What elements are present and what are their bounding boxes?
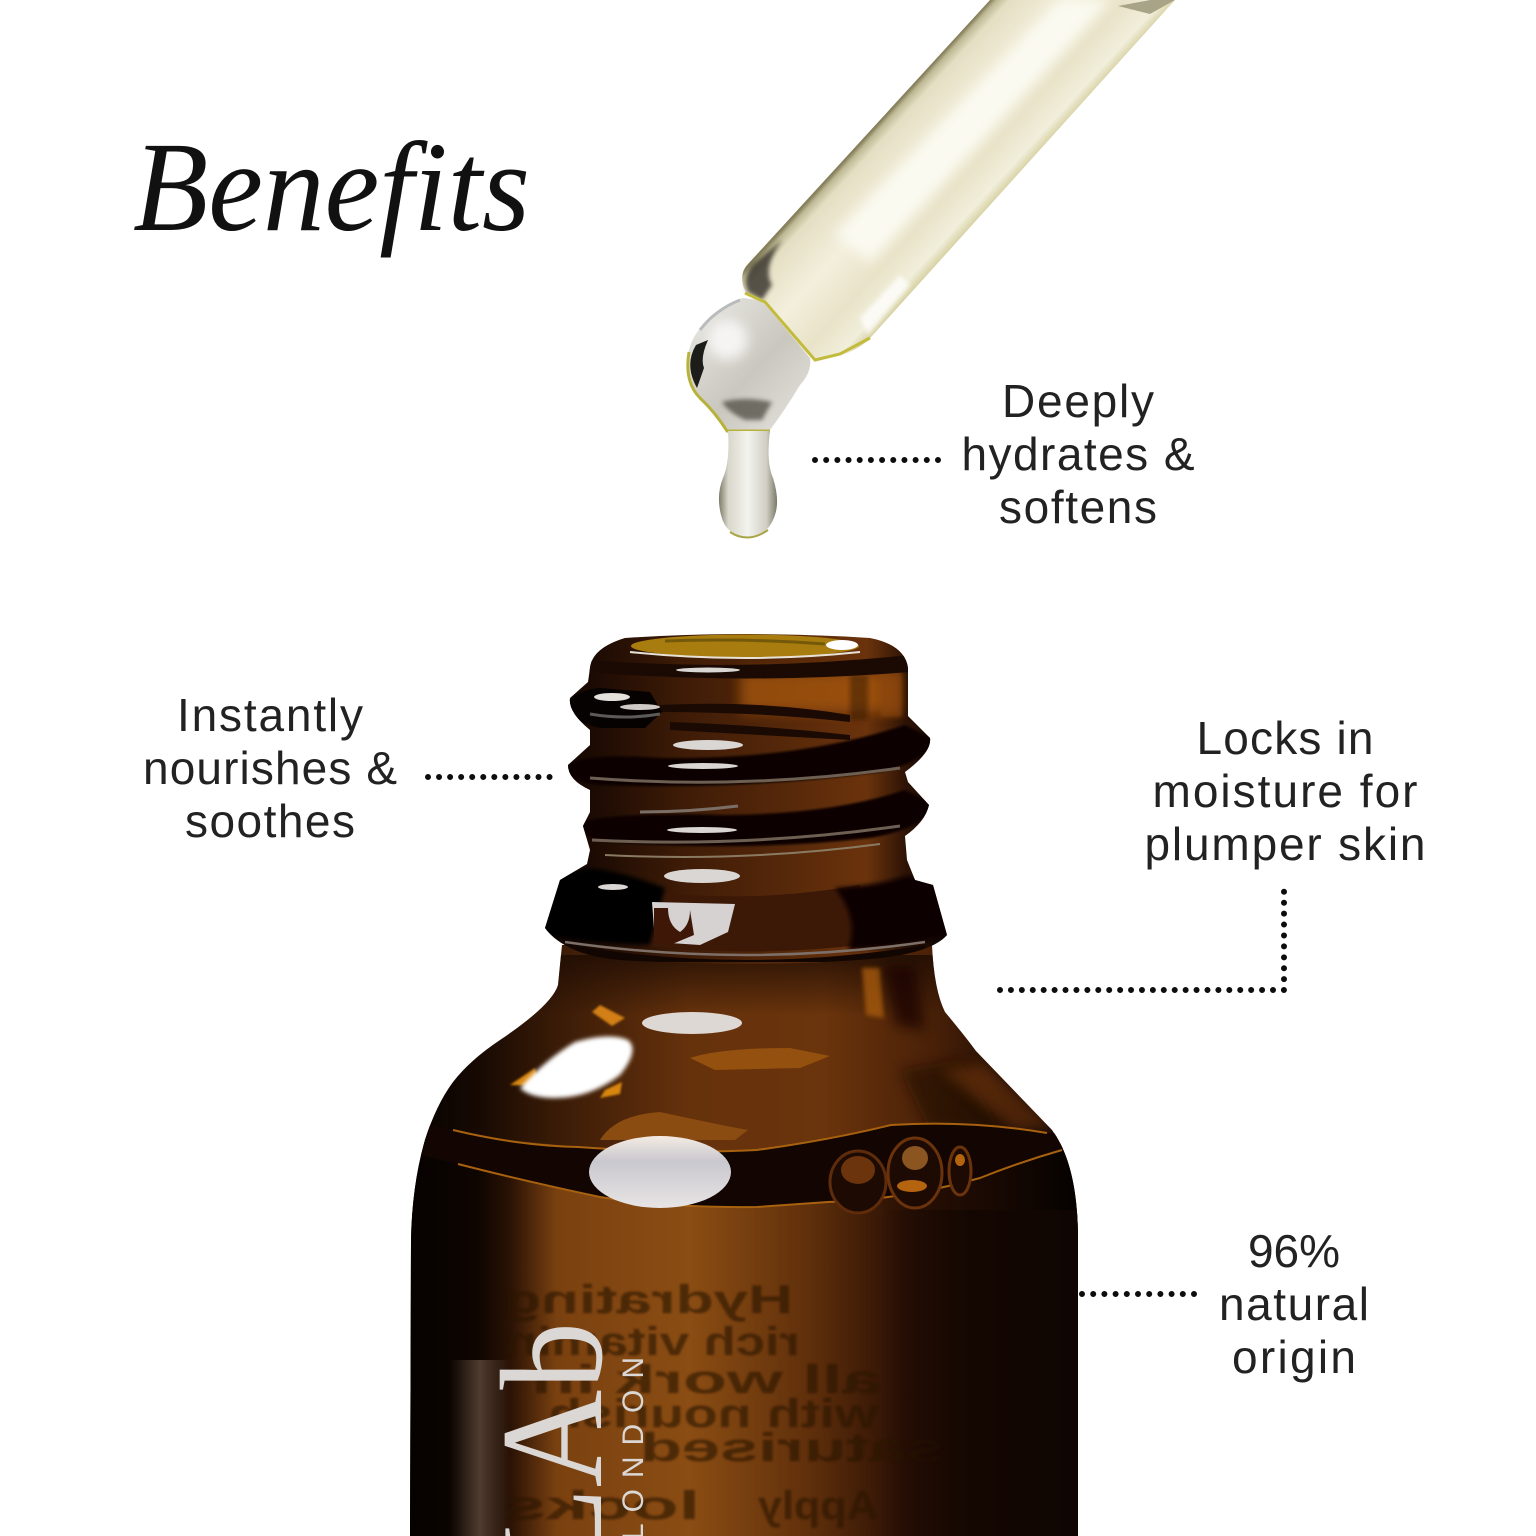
- callout: natural origin: 96%: [1248, 1225, 1340, 1277]
- callout: instantly nourishes: [143, 689, 550, 847]
- reversed back label text: with nourish: [548, 1392, 879, 1436]
- reversed back label text: [518, 1283, 883, 1528]
- callout: deeply hydrates: hydrates &: [962, 428, 1194, 480]
- brand label: LONDON: [617, 1357, 650, 1536]
- callout: natural origin: natural: [1219, 1278, 1369, 1330]
- callout: locks in moisture: moisture for: [1152, 765, 1418, 817]
- screw thread three: [580, 790, 935, 857]
- air bubbles: [830, 1138, 971, 1213]
- light spot: [589, 1136, 731, 1208]
- falling drop: [719, 431, 777, 538]
- pipette with oil drop: [688, 0, 1175, 538]
- callout: deeply hydrates: Deeply: [1002, 375, 1154, 427]
- reversed back label text: all work in: [532, 1358, 882, 1402]
- oil fill: [400, 1120, 1100, 1536]
- collar: [540, 868, 950, 962]
- hanging bulb: [688, 298, 810, 431]
- callout: instantly nourishes: nourishes &: [143, 742, 397, 794]
- reversed back label text: rich vitamin: [505, 1320, 800, 1364]
- callout: natural origin: [1082, 1225, 1369, 1383]
- dark meniscus band: [421, 1122, 1064, 1208]
- callout: deeply hydrates: [815, 375, 1194, 533]
- screw thread one: [566, 688, 662, 728]
- reversed back label text: saturised: [640, 1426, 945, 1470]
- reversed back label text: Apply: [757, 1484, 878, 1528]
- reversed back label text: Hydrating: [503, 1278, 793, 1322]
- callout: natural origin: origin: [1232, 1331, 1356, 1383]
- amber bottle: [400, 630, 1100, 1536]
- title: Benefits: [133, 116, 530, 258]
- lip rim: [588, 655, 910, 678]
- callout: locks in moisture: [1000, 712, 1426, 990]
- pipette tube: [742, 0, 1175, 362]
- callout: instantly nourishes: soothes: [185, 795, 355, 847]
- callout: deeply hydrates: softens: [999, 481, 1157, 533]
- screw thread two: [564, 725, 935, 786]
- neck: [540, 630, 950, 970]
- bottle body: [400, 940, 1100, 1536]
- neck glints: [598, 668, 743, 945]
- callout: instantly nourishes: Instantly: [177, 689, 363, 741]
- callout: locks in moisture: Locks in: [1196, 712, 1374, 764]
- shoulder highlights: [510, 1005, 830, 1140]
- reversed back label text: locks: [503, 1484, 700, 1528]
- bottle opening: [630, 634, 860, 658]
- callout: locks in moisture: plumper skin: [1144, 818, 1426, 870]
